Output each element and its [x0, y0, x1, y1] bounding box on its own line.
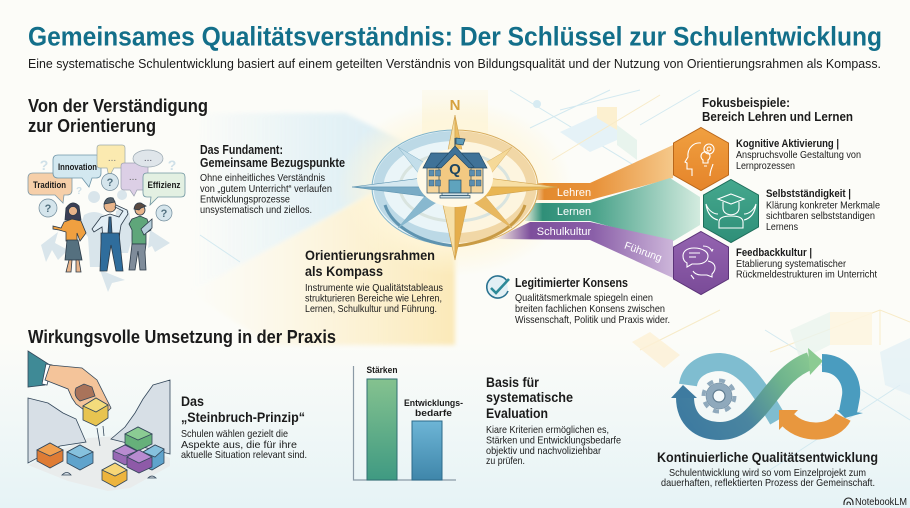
text block: Das Steinbruch-Prinzip: Das — [181, 393, 204, 409]
heading: Fokusbeispiele: Bereich Lehren und Lernen — [702, 110, 853, 124]
text block: Orientierungsrahmen als Kompass: Orientierungsrahmen — [305, 247, 435, 263]
text block: Selbstständigkeit: Klärung konkreter Merkmale — [766, 200, 880, 212]
icon: check mark — [487, 276, 509, 298]
text block: Das Fundament: unsystematisch und ziellos. — [200, 204, 312, 216]
text block: Feedbackkultur: Rückmeldestrukturen im Unterricht — [736, 268, 877, 280]
compass — [352, 97, 557, 260]
ribbon: Lernen: Lernen — [557, 206, 591, 218]
text block: Kontinuierliche Qualitätsentwicklung: dauerhaften, reflektierten Prozess der Gemeinschaft. — [661, 477, 875, 489]
icon: school building: Q — [449, 161, 461, 178]
text block: Das Fundament: von „gutem Unterricht“ verlaufen — [200, 183, 332, 195]
text block: Orientierungsrahmen als Kompass: Lernen, Schulkultur und Führung. — [305, 303, 437, 315]
bubble: Innovation — [53, 155, 101, 187]
compass ring — [372, 130, 538, 246]
bubble: yellow: ... — [108, 153, 116, 164]
text block: Selbstständigkeit: sichtbaren selbststandigen — [766, 210, 875, 222]
text block: Basis für systematische Evaluation: zu prüfen. — [486, 455, 525, 467]
text block: Das Steinbruch-Prinzip — [181, 393, 307, 461]
bar: Entwicklungsbedarfe — [404, 398, 463, 480]
bar: Entwicklungsbedarfe: Entwicklungs- — [404, 398, 463, 409]
section heading: Von der Verständigung zur Orientierung: zur Orientierung — [28, 116, 156, 136]
person: man with tablet — [129, 203, 152, 270]
text block: Kognitive Aktivierung — [736, 138, 861, 172]
text block: Feedbackkultur: Etablierung systematischer — [736, 258, 846, 270]
text block: Basis für systematische Evaluation: objektiv und nachvoliziehbar — [486, 445, 601, 457]
text block: Das Steinbruch-Prinzip: „Steinbruch-Prinzip“ — [181, 409, 305, 425]
icon: gear — [704, 380, 734, 412]
text block: Das Fundament: Ohne einheitliches Verständnis — [200, 172, 325, 184]
ribbon: Lehren: Lehren — [557, 187, 591, 199]
blocks — [37, 398, 164, 487]
compass N: N — [450, 97, 460, 114]
text block: Kontinuierliche Qualitätsentwicklung — [657, 449, 878, 489]
icon: orange hexagon with head — [674, 128, 728, 190]
icon: school building — [423, 138, 487, 198]
bubble: grey cloud — [133, 150, 163, 167]
text block: Das Fundament: Das Fundament: — [200, 143, 283, 157]
heading: Fokusbeispiele: Fokusbeispiele: — [702, 96, 790, 110]
bar: Stärken: Stärken — [366, 365, 398, 376]
bubble: purple — [121, 163, 148, 196]
arrowhead: green — [808, 348, 823, 375]
arc: orange — [788, 417, 843, 431]
text block: Orientierungsrahmen als Kompass — [305, 247, 443, 315]
text block: Basis für systematische Evaluation: Basis für — [486, 374, 539, 390]
question marks — [39, 157, 176, 221]
bubble: Effizienz — [143, 173, 185, 205]
bubble: yellow — [97, 145, 125, 177]
person: man with tie — [92, 198, 128, 271]
text block: Selbstständigkeit: Selbstständigkeit | — [766, 188, 851, 200]
text block: Basis für systematische Evaluation: Stärken und Entwicklungsbedarfe — [486, 434, 621, 446]
text block: Feedbackkultur — [736, 247, 877, 280]
arc: right blue — [822, 363, 851, 412]
text block: Das Steinbruch-Prinzip: aktuelle Situation relevant sind. — [181, 449, 307, 461]
bubble: Tradition: Tradition — [33, 180, 66, 191]
question marks: ? — [76, 186, 82, 197]
text block: Kontinuierliche Qualitätsentwicklung: Kontinuierliche Qualitätsentwicklung — [657, 449, 878, 465]
bubble: Innovation: Innovation — [58, 162, 97, 173]
text block: Das Steinbruch-Prinzip: Aspekte aus, die für ihre — [181, 439, 297, 451]
text block: Kognitive Aktivierung: Kognitive Aktivierung | — [736, 138, 839, 150]
question marks: ? — [161, 208, 168, 220]
text block: Das Fundament — [200, 143, 345, 216]
illustration: people with speech bubbles — [28, 145, 185, 292]
text block: Legitimierter Konsens: Qualitätsmerkmale spiegeln einen — [515, 292, 653, 304]
text block: Kognitive Aktivierung: Anspruchsvolle Gestaltung von — [736, 149, 861, 161]
text block: Selbstständigkeit — [766, 188, 880, 233]
text block: Orientierungsrahmen als Kompass: strukturieren Bereiche wie Lehren, — [305, 292, 442, 304]
bubble: Tradition — [28, 173, 72, 203]
illustration: quarry with hand and blocks — [28, 351, 170, 491]
text block: Kontinuierliche Qualitätsentwicklung: Schulentwicklung wird so vom Einzelprojekt zum — [669, 467, 866, 479]
ribbon: Schulkultur and Führung — [495, 222, 673, 278]
ribbon: Schulkultur and Führung: Schulkultur — [537, 226, 592, 238]
compass star — [352, 115, 557, 260]
icon: purple hexagon with speech bubbles — [674, 232, 728, 294]
text block: Das Fundament: Entwicklungsprozesse — [200, 194, 290, 206]
section heading: Von der Verständigung zur Orientierung — [28, 96, 208, 136]
question marks: ? — [107, 177, 114, 189]
bar chart — [354, 365, 463, 480]
bubble: purple: ... — [129, 172, 137, 183]
text block: Legitimierter Konsens: breiten fachlichen Konsens zwischen — [515, 303, 665, 315]
bubble: Effizienz: Effizienz — [148, 180, 181, 191]
arc: dark blue to green — [685, 361, 810, 431]
icon: infinity cycle — [671, 348, 863, 431]
arc: light blue — [688, 362, 778, 420]
text block: Legitimierter Konsens: Wissenschaft, Politik und Praxis wider. — [515, 314, 670, 326]
bar: Entwicklungsbedarfe: bedarfe — [415, 408, 452, 419]
arrowhead: dark blue — [671, 385, 697, 398]
icon: green hexagon with graduate — [704, 180, 758, 242]
text block: Feedbackkultur: Feedbackkultur | — [736, 247, 812, 259]
text block: Legitimierter Konsens — [515, 275, 670, 326]
person: woman — [53, 203, 86, 272]
text block: Selbstständigkeit: Lernens — [766, 221, 798, 233]
question marks: ? — [40, 157, 48, 173]
rocks — [28, 380, 170, 491]
ribbon: Lehren — [530, 145, 673, 200]
section heading: Von der Verständigung zur Orientierung: Von der Verständigung — [28, 96, 208, 116]
ribbon: Lernen — [525, 178, 700, 243]
text block: Legitimierter Konsens: Legitimierter Konsens — [515, 275, 628, 290]
heading: Wirkungsvolle Umsetzung: Wirkungsvolle Umsetzung in der Praxis — [28, 327, 336, 347]
text block: Kognitive Aktivierung: Lernprozessen — [736, 160, 795, 172]
text block: Orientierungsrahmen als Kompass: Instrumente wie Qualitätstableaus — [305, 282, 443, 294]
text block: Basis für systematische Evaluation — [486, 374, 621, 467]
question marks: ? — [45, 203, 52, 215]
heading: Fokusbeispiele — [702, 96, 853, 124]
text block: Orientierungsrahmen als Kompass: als Kompass — [305, 263, 383, 279]
question marks: ? — [168, 157, 176, 173]
hand — [28, 351, 111, 413]
text block: Basis für systematische Evaluation: Kiare Kriterien ermöglichen es, — [486, 424, 609, 436]
ribbon: Schulkultur and Führung: Führung — [623, 240, 664, 264]
text block: Basis für systematische Evaluation: Evaluation — [486, 405, 548, 421]
text block: Basis für systematische Evaluation: systematische — [486, 389, 573, 405]
bubble: grey cloud: ... — [144, 153, 152, 164]
subtitle: Eine systematische Schulentwicklung basiert auf einem geteilten Verständnis von Bildungsqualität und der Nutzung von Orientierungsrahmen als Kompass. — [28, 56, 881, 71]
text block: Das Fundament: Gemeinsame Bezugspunkte — [200, 156, 345, 170]
text block: Das Steinbruch-Prinzip: Schulen wählen gezielt die — [181, 428, 288, 440]
